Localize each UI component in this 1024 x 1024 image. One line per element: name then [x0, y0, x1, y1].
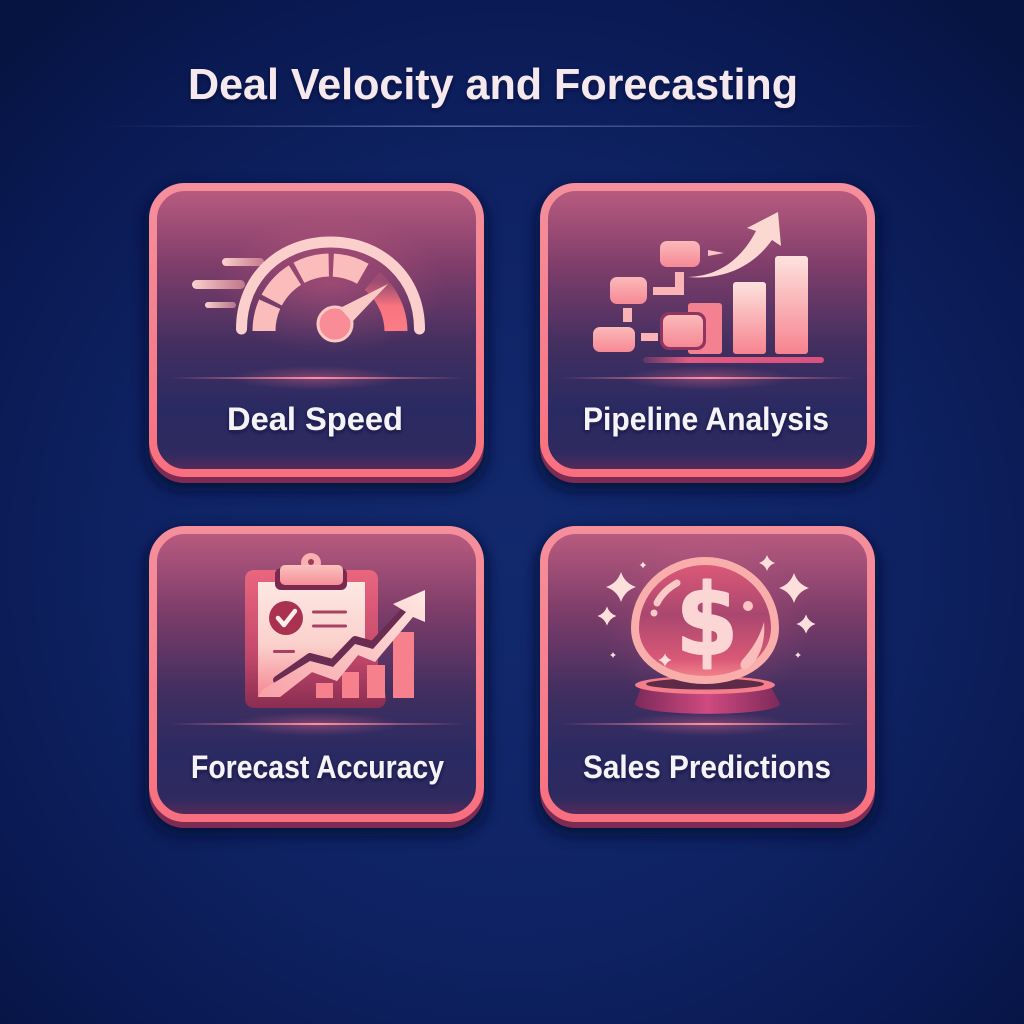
icon: clipboard with trend arrow — [245, 553, 425, 708]
label: Pipeline Analysis — [583, 401, 829, 437]
icon: pipeline flow and bars — [593, 212, 824, 363]
divider — [170, 366, 464, 390]
panel: Deal Speed — [145, 187, 488, 491]
divider — [561, 712, 855, 736]
icon: crystal ball with dollar sign — [598, 535, 816, 715]
card frame — [544, 530, 871, 818]
icon: crystal ball with dollar sign: $ — [676, 564, 738, 678]
card frame — [544, 187, 871, 473]
card frame — [153, 530, 480, 818]
card frame — [153, 187, 480, 473]
title: Deal Velocity and Forecasting — [188, 60, 798, 109]
panel: Pipeline Analysis — [536, 187, 879, 491]
panel: Sales Predictions — [536, 530, 879, 836]
label: Forecast Accuracy — [191, 749, 444, 785]
divider — [170, 712, 464, 736]
label: Deal Speed — [227, 401, 403, 437]
panel: Forecast Accuracy — [145, 530, 488, 836]
icon: speedometer — [192, 215, 445, 355]
label: Sales Predictions — [583, 749, 831, 785]
divider — [561, 366, 855, 390]
